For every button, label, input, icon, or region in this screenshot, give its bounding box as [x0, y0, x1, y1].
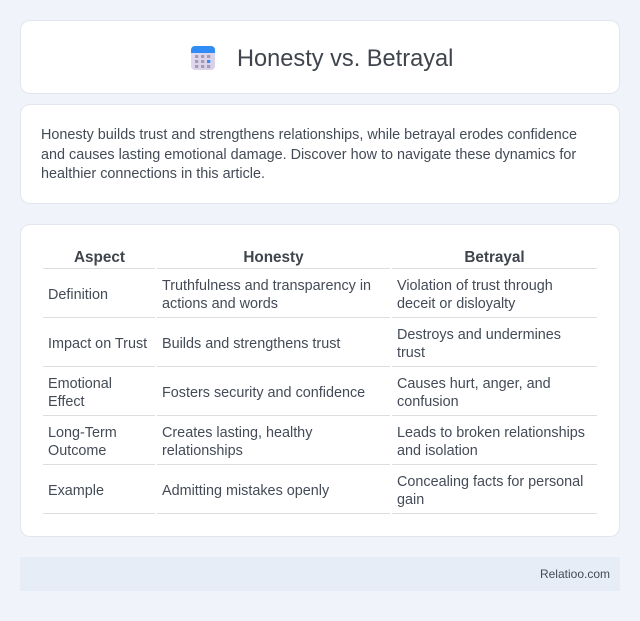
comparison table [43, 249, 597, 514]
row: Long-Term Outcome: Creates lasting, healthy [162, 425, 312, 441]
footer credit: Relatioo.com [540, 567, 610, 581]
intro text [41, 127, 577, 182]
row: Long-Term Outcome [48, 425, 585, 459]
row: Emotional Effect: Effect [48, 394, 85, 410]
row: Emotional Effect: Fosters security and confidence [162, 385, 365, 401]
intro text: healthier connections in this article. [41, 166, 265, 182]
icon: calendar [191, 46, 215, 70]
intro card [20, 104, 620, 204]
title card [20, 20, 620, 94]
table card [20, 224, 620, 537]
row: Emotional Effect: Causes hurt, anger, and [397, 376, 551, 392]
title: Honesty vs. Betrayal [237, 46, 453, 72]
row: Definition: Truthfulness and transparency in [162, 278, 371, 294]
row: Example: Concealing facts for personal [397, 474, 583, 490]
row: Impact on Trust: trust [397, 345, 425, 361]
row: Definition: deceit or disloyalty [397, 296, 515, 312]
row: Definition [48, 278, 553, 312]
row: Emotional Effect: Emotional [48, 376, 112, 392]
row: Long-Term Outcome: Long-Term [48, 425, 117, 441]
row: Impact on Trust: Destroys and undermines [397, 327, 561, 343]
header: Aspect: Aspect [74, 249, 125, 266]
intro text: Honesty builds trust and strengthens relationships, while betrayal erodes confidence [41, 127, 577, 143]
row: Long-Term Outcome: Outcome [48, 443, 106, 459]
header: Honesty: Honesty [243, 249, 304, 266]
row: Impact on Trust [48, 327, 561, 361]
row: Example: gain [397, 492, 424, 508]
row: Impact on Trust: Builds and strengthens trust [162, 336, 340, 352]
row: Emotional Effect [48, 376, 551, 410]
row: Definition: Definition [48, 287, 108, 303]
row: Example: Admitting mistakes openly [162, 483, 329, 499]
intro text: and causes lasting emotional damage. Discover how to navigate these dynamics for [41, 146, 576, 162]
row: Long-Term Outcome: Leads to broken relationships [397, 425, 585, 441]
row: Long-Term Outcome: relationships [162, 443, 243, 459]
row: Long-Term Outcome: and isolation [397, 443, 478, 459]
row: Impact on Trust: Impact on Trust [48, 336, 147, 352]
row: Definition: actions and words [162, 296, 278, 312]
footer bar [20, 557, 620, 591]
row: Emotional Effect: confusion [397, 394, 459, 410]
row: Example: Example [48, 483, 104, 499]
row: Definition: Violation of trust through [397, 278, 553, 294]
row: Example [48, 474, 583, 508]
header: Betrayal: Betrayal [464, 249, 525, 266]
